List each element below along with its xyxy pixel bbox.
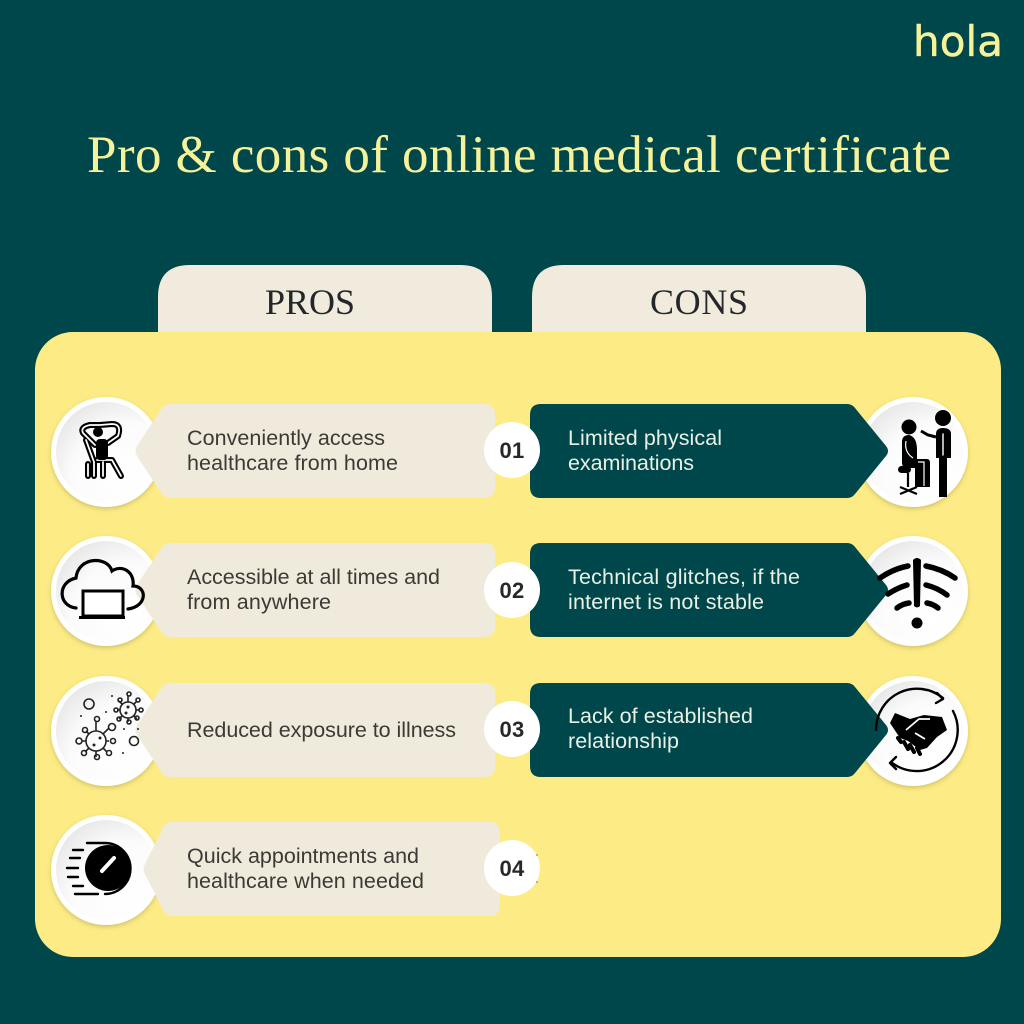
icon: relaxing person xyxy=(82,424,121,476)
icon: virus xyxy=(76,692,143,760)
logo: hola xyxy=(913,17,1003,66)
icon: doctor examination xyxy=(898,410,951,497)
pros item 2: from anywhere xyxy=(187,590,331,614)
pros item 3 xyxy=(136,683,495,777)
tab: cons: CONS xyxy=(650,282,748,322)
cons item 2: internet is not stable xyxy=(568,590,764,614)
number badge 02 xyxy=(484,562,540,618)
number badge 04: 04 xyxy=(499,856,525,881)
circle badge row 1 left xyxy=(51,397,161,507)
pros item 1 xyxy=(136,404,495,498)
circle badge row 3 left xyxy=(51,676,161,786)
tab: pros: PROS xyxy=(265,282,355,322)
number badge 03 xyxy=(484,701,540,757)
icon: cloud and laptop xyxy=(62,561,143,619)
number badge 01: 01 xyxy=(499,438,525,463)
circle badge row 2 left xyxy=(51,536,161,646)
circle badge row 4 left xyxy=(51,815,161,925)
cons item 3: Lack of established xyxy=(568,704,753,728)
tab: pros xyxy=(158,265,492,334)
tab: cons xyxy=(532,265,866,334)
number badge 03: 03 xyxy=(499,717,525,742)
circle badge row 2 right xyxy=(858,536,968,646)
cons item 3: relationship xyxy=(568,729,679,753)
number badge 01 xyxy=(484,422,540,478)
pros item 4: healthcare when needed xyxy=(187,869,424,893)
icon: handshake with cycle arrows xyxy=(876,689,958,771)
cons item 2 xyxy=(530,543,888,637)
pros item 3: Reduced exposure to illness xyxy=(187,718,456,742)
icon: speedometer xyxy=(67,843,131,894)
number badge 02: 02 xyxy=(499,578,525,603)
pros item 4 xyxy=(144,822,500,916)
title: Pro & cons of online medical certificate xyxy=(87,126,951,184)
cons item 1: Limited physical xyxy=(568,426,722,450)
main yellow panel xyxy=(35,332,1001,957)
pros item 4: Quick appointments and xyxy=(187,844,419,868)
circle badge row 1 right xyxy=(858,397,968,507)
cons item 2: Technical glitches, if the xyxy=(568,565,800,589)
cons item 1: examinations xyxy=(568,451,694,475)
pros item 1: Conveniently access xyxy=(187,426,385,450)
cons item 1 xyxy=(530,404,888,498)
icon: unstable wifi xyxy=(880,558,955,628)
pros item 2 xyxy=(136,543,495,637)
number badge 04 xyxy=(484,840,540,896)
pros item 1: healthcare from home xyxy=(187,451,398,475)
cons item 3 xyxy=(530,683,888,777)
pros item 2: Accessible at all times and xyxy=(187,565,440,589)
circle badge row 3 right xyxy=(858,676,968,786)
